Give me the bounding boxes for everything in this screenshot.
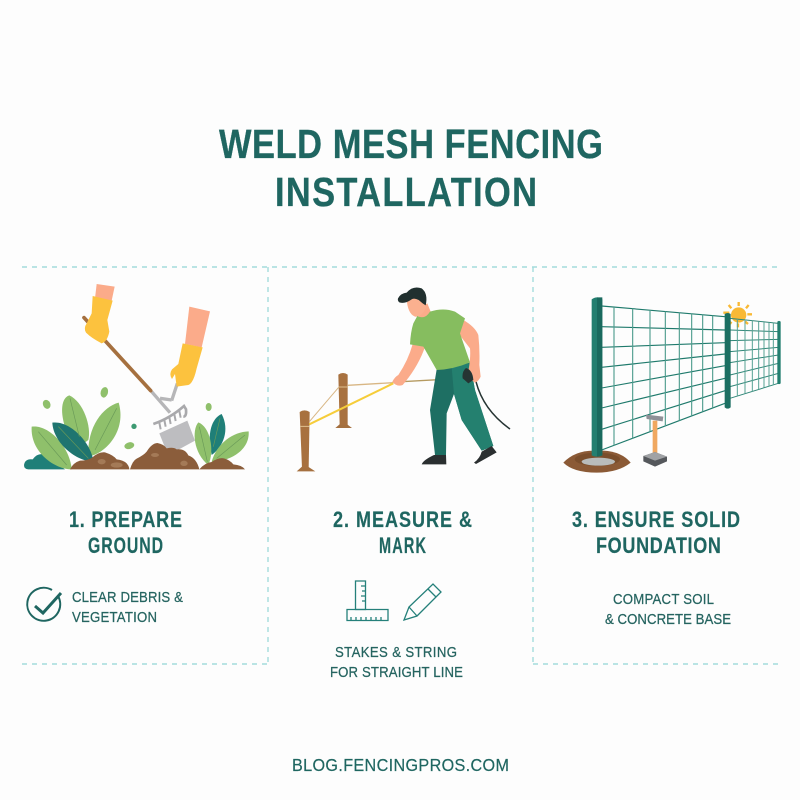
text: clear debris: CLEAR DEBRIS & — [72, 588, 184, 605]
text: clear debris: VEGETATION — [72, 608, 157, 625]
plants right — [195, 403, 249, 465]
tamper — [643, 415, 667, 467]
cord — [476, 382, 510, 429]
illustration: man measuring between stakes — [297, 287, 510, 471]
head and neck — [398, 287, 431, 320]
text: compact soil: COMPACT SOIL — [613, 590, 714, 607]
sun — [723, 302, 752, 327]
text: compact soil — [605, 590, 731, 627]
illustration: gardening hands, rake and plants — [24, 284, 249, 469]
left arm and glove — [85, 284, 115, 343]
panel: step 3 solid foundation — [563, 297, 781, 627]
stakes — [297, 373, 352, 471]
plants left — [24, 386, 137, 469]
fence posts — [592, 297, 781, 457]
heading: step 2 — [333, 508, 472, 558]
text: stakes and string — [330, 643, 463, 680]
heading: step 3 — [572, 508, 740, 558]
legs — [430, 363, 493, 455]
panel: step 2 measure and mark — [297, 287, 510, 680]
shoes — [422, 446, 497, 464]
text: stakes and string: STAKES & STRING — [335, 643, 457, 660]
mesh near section — [602, 306, 725, 450]
tape measure — [462, 368, 473, 383]
text: compact soil: & CONCRETE BASE — [605, 610, 731, 627]
mesh far section — [730, 318, 778, 398]
heading: step 2: 2. MEASURE & — [333, 508, 472, 532]
text: stakes and string: FOR STRAIGHT LINE — [330, 663, 463, 680]
heading: step 1 — [69, 508, 182, 559]
title: WELD MESH FENCING — [219, 122, 603, 168]
strings and tape — [309, 378, 463, 424]
left arm — [392, 344, 425, 386]
icon: set square ruler — [347, 581, 388, 620]
icon: check circle — [27, 588, 61, 621]
footer url: BLOG.FENCINGPROS.COM — [292, 755, 509, 775]
illustration: weld mesh fence and tamper — [563, 297, 781, 473]
right arm — [458, 320, 481, 383]
heading: step 2: MARK — [379, 533, 426, 558]
panel: step 1 prepare ground — [24, 284, 249, 625]
heading: step 3: FOUNDATION — [596, 534, 721, 558]
right arm and glove — [170, 307, 210, 387]
title — [219, 122, 603, 216]
icon: pencil — [404, 584, 441, 620]
heading: step 1: GROUND — [88, 535, 163, 559]
shirt — [410, 309, 470, 370]
heading: step 3: 3. ENSURE SOLID — [572, 508, 740, 532]
rake and shovel — [84, 318, 195, 451]
text: clear debris — [72, 588, 184, 625]
soil mounds — [70, 443, 245, 469]
title: INSTALLATION — [275, 170, 537, 216]
foundation mound — [563, 451, 631, 473]
heading: step 1: 1. PREPARE — [69, 508, 182, 532]
